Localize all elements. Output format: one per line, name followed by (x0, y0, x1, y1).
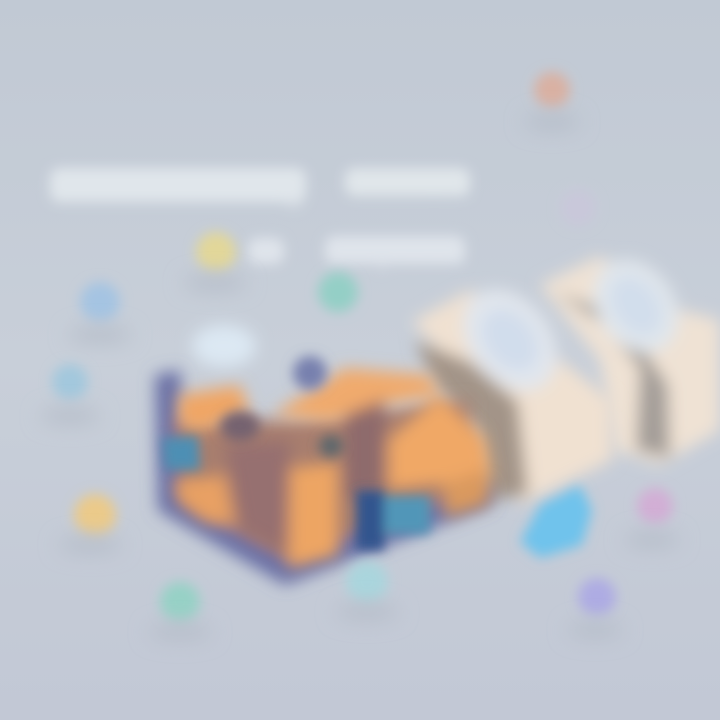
icon: lilac dot (560, 190, 596, 226)
title: for (248, 238, 284, 271)
icon: cyan dot (346, 561, 388, 603)
icon: blue dot (80, 282, 120, 322)
orange boxes (175, 368, 492, 568)
blue speech bubble (520, 485, 592, 558)
icon: orange dot (534, 72, 570, 108)
icon: pink dot (637, 488, 673, 524)
icon: teal dot (318, 272, 358, 312)
icon dots (52, 72, 673, 622)
parcel: back right (540, 243, 720, 465)
dot captions (40, 114, 680, 640)
dark box joints (220, 356, 343, 457)
blue boxes (162, 436, 430, 550)
icon: green dot (160, 582, 200, 622)
icon: purple dot (578, 578, 616, 616)
parcel: front right (412, 271, 612, 505)
title: Which (345, 163, 470, 204)
title: Impact (325, 234, 465, 272)
icon: amber dot (74, 494, 116, 536)
title (50, 163, 470, 272)
crate base (155, 370, 492, 585)
speech bubble (192, 325, 256, 367)
title: Delivering (50, 165, 306, 209)
icon: sky dot (52, 364, 88, 400)
icon: yellow dot (196, 232, 236, 272)
